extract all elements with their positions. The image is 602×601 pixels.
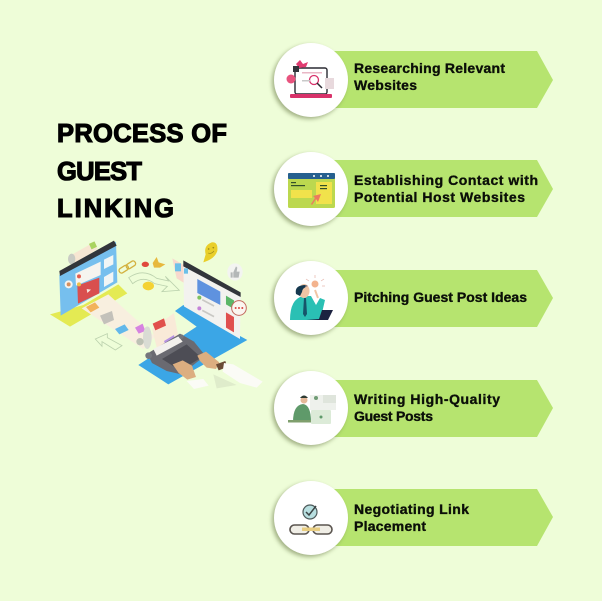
typing hands and sleeves	[173, 352, 263, 389]
left browser window	[59, 241, 117, 316]
illustration: guest posting workflow	[50, 241, 263, 389]
step 4 banner	[320, 380, 553, 437]
step 3	[272, 261, 553, 337]
paper ribbon	[82, 294, 155, 349]
outlined arrow: top	[129, 273, 179, 292]
step 1 label: Websites	[354, 77, 417, 93]
step 4 label	[354, 391, 500, 424]
step 5 label	[354, 501, 469, 534]
step 1 banner	[320, 51, 553, 108]
chat bubble	[232, 301, 246, 315]
blue platform	[138, 305, 247, 384]
step 2	[272, 152, 553, 228]
title	[57, 120, 227, 223]
step 5 circle	[272, 481, 348, 557]
step 2 label: Potential Host Websites	[354, 189, 525, 205]
title: PROCESS OF	[57, 120, 227, 148]
step 4 circle	[272, 371, 348, 447]
thumbs-up badge	[227, 263, 243, 281]
step 2 label: Establishing Contact with	[354, 172, 538, 188]
icon: web page with cursor	[288, 173, 335, 208]
chain, stars and coin	[118, 257, 165, 290]
step 5 label: Placement	[354, 518, 426, 534]
icon: person writing at laptop	[288, 395, 336, 424]
step 4	[272, 371, 553, 447]
outlined arrow: bottom	[95, 334, 122, 350]
step 2 label	[354, 172, 538, 205]
step 3 banner	[320, 270, 553, 327]
right browser window	[172, 258, 241, 339]
step 4 label: Writing High-Quality	[354, 391, 500, 407]
step 4 label: Guest Posts	[354, 408, 433, 424]
icon: check mark and chain link	[290, 505, 332, 534]
step 1	[272, 43, 553, 119]
step 3 label: Pitching Guest Post Ideas	[354, 289, 527, 305]
step 1 label: Researching Relevant	[354, 60, 505, 76]
step 3 circle	[272, 261, 348, 337]
title: GUEST	[57, 158, 142, 186]
icon: researching laptop with magnifier	[286, 60, 334, 98]
step 5 banner	[320, 489, 553, 546]
yellow platform	[50, 284, 127, 327]
step 1 circle	[272, 43, 348, 119]
typewriter	[145, 334, 205, 374]
icon: person with idea and laptop	[290, 275, 333, 320]
step 5	[272, 481, 553, 557]
smiley balloon	[203, 242, 217, 262]
typed page	[152, 313, 178, 350]
step 2 circle	[272, 152, 348, 228]
title: LINKING	[57, 195, 174, 223]
step 5 label: Negotiating Link	[354, 501, 469, 517]
step 1 label	[354, 60, 505, 93]
step 2 banner	[320, 160, 553, 217]
